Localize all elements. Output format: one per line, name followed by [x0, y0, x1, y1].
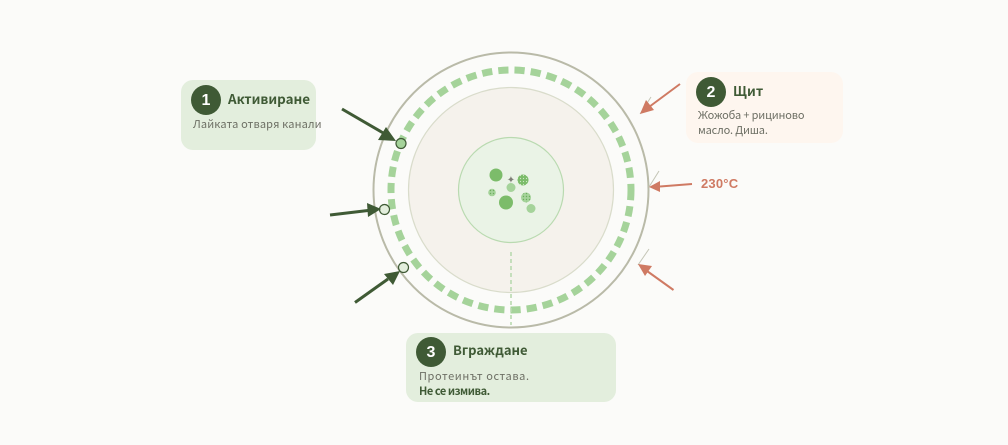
outer ring [374, 52, 648, 328]
card 1: activation [181, 80, 316, 150]
text 3: Не се измива. [419, 382, 490, 398]
card 3: embedding [406, 333, 616, 402]
number badge 1 [191, 85, 221, 115]
red arrows [638, 84, 692, 290]
number badge 1: 1 [202, 92, 210, 109]
number badge 3: 3 [427, 344, 435, 361]
text 3: Протеинът остава. [419, 368, 530, 384]
green arrows [330, 109, 400, 302]
anchor dots [380, 138, 408, 272]
temperature label: 230°C [701, 176, 738, 191]
text 2: Жожоба + рициново [698, 107, 804, 123]
dashed membrane ring [391, 70, 631, 310]
inner layer [408, 88, 614, 292]
number badge 3 [416, 337, 446, 367]
card 2: shield [686, 72, 843, 143]
heading 2: Щит [733, 80, 763, 100]
heading 1: Активиране [228, 88, 310, 108]
text 3 [419, 368, 530, 398]
small tick marks [638, 97, 659, 265]
protein particles [488, 168, 536, 213]
text 2 [698, 107, 804, 138]
heading 3: Вграждане [453, 340, 528, 359]
protein line [510, 252, 512, 325]
protein particles: ✦ [507, 175, 515, 186]
core [458, 138, 564, 242]
text 1: Лайката отваря канали [193, 116, 322, 132]
text 2: масло. Диша. [698, 122, 768, 138]
number badge 2 [696, 77, 726, 107]
number badge 2: 2 [707, 84, 715, 101]
